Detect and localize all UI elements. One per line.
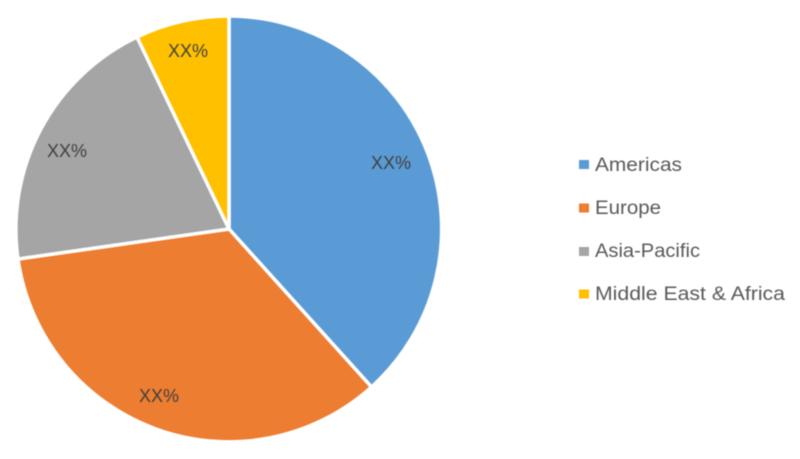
- legend item: Middle East & Africa: Middle East & Africa: [595, 284, 785, 305]
- slice: Middle East & Africa: [137, 16, 229, 229]
- legend item: Europe: Europe: [595, 198, 661, 219]
- legend item: Asia-Pacific: Asia-Pacific: [595, 241, 700, 262]
- slice: Americas: [229, 16, 442, 387]
- slice: Asia-Pacific: [16, 37, 229, 259]
- legend: [579, 155, 785, 305]
- data label: Asia-Pacific: XX%: [47, 141, 87, 161]
- data label: Americas: XX%: [371, 153, 411, 173]
- data label: Europe: XX%: [139, 386, 179, 406]
- data label: Middle East & Africa: XX%: [168, 41, 208, 61]
- slice: Europe: [18, 229, 372, 442]
- pie chart: [16, 16, 442, 442]
- legend item: Americas: Americas: [595, 155, 682, 176]
